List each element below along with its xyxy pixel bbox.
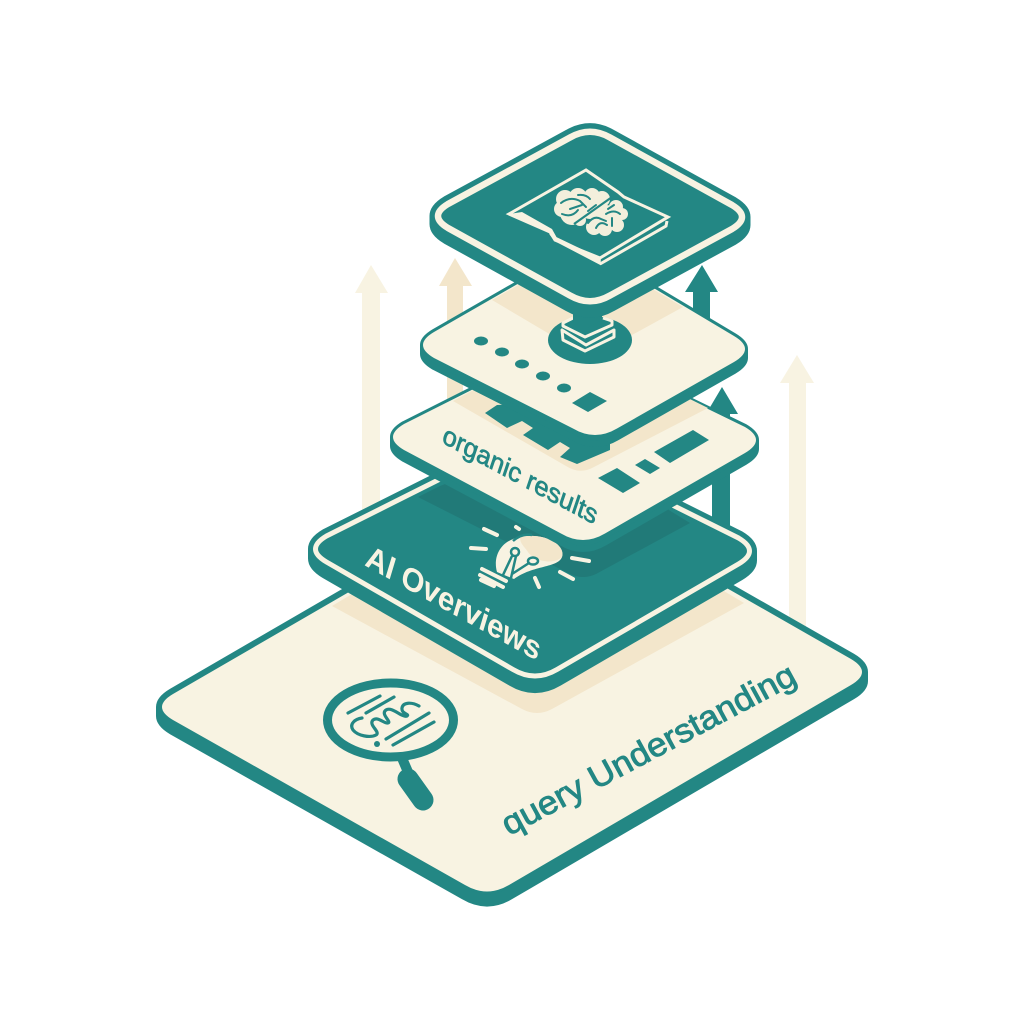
ranking dots	[474, 336, 607, 412]
plate face	[162, 488, 862, 892]
arrow: far-left cream	[355, 265, 388, 540]
plate face with cream ring	[438, 132, 742, 301]
plate face	[423, 252, 745, 435]
plate edge	[438, 132, 742, 309]
plate face	[393, 346, 756, 540]
arrow: teal lower right	[706, 387, 738, 540]
icon: lightbulb	[471, 527, 589, 587]
plate edge	[423, 252, 745, 444]
result bars	[598, 430, 709, 493]
icon: stacked layers	[562, 318, 614, 351]
teal circle	[548, 316, 632, 364]
arrow: teal upper right	[685, 265, 718, 340]
plate edge	[162, 488, 862, 900]
panel: knowledge top plate	[438, 132, 742, 328]
shadow band	[453, 339, 708, 471]
icon: brain and book	[509, 170, 668, 264]
shadow band	[418, 440, 690, 577]
panel: AI Overviews plate	[316, 438, 750, 686]
panel: organic results plate	[393, 339, 756, 549]
icon: magnifying glass	[328, 683, 454, 800]
connector stem	[573, 305, 602, 328]
plate edge	[316, 438, 750, 686]
panel: query understanding base plate	[162, 481, 862, 900]
plate edge	[393, 346, 756, 549]
stepped blocks	[485, 400, 610, 464]
panel: ranking dots plate	[423, 248, 745, 444]
plate face with cream ring	[316, 438, 750, 676]
arrow: tan left	[439, 258, 472, 420]
label: AI Overviews: AI Overviews	[362, 539, 545, 668]
label: query Understanding: query Understanding	[495, 656, 802, 842]
brain	[554, 188, 628, 236]
shadow band	[492, 248, 683, 358]
arrow: far-right cream	[780, 355, 814, 650]
shadow band	[332, 481, 744, 713]
label: organic results: organic results	[439, 419, 602, 530]
